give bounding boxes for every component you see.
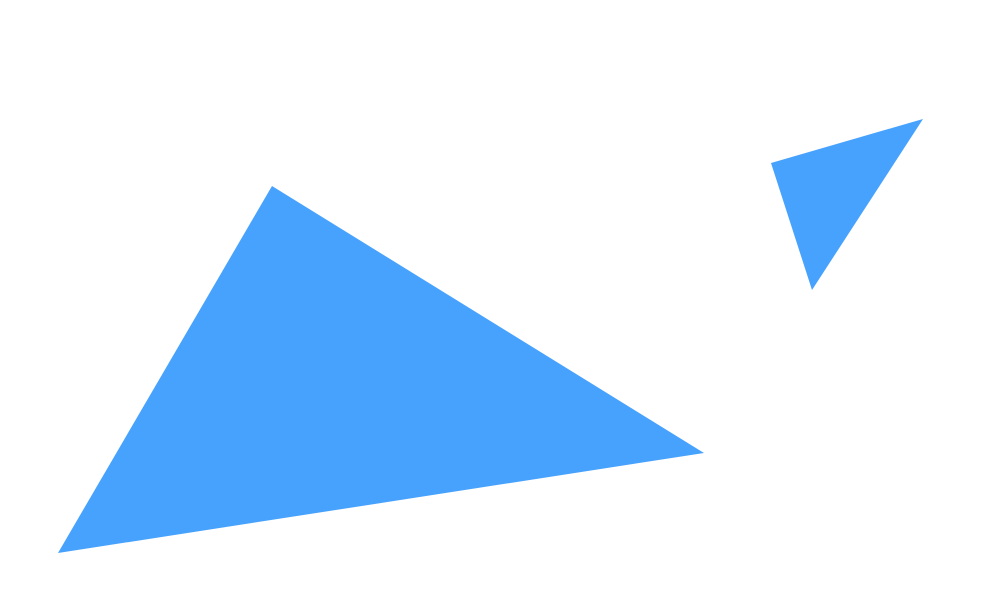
small blue triangle — [771, 119, 923, 290]
large blue triangle — [58, 186, 704, 553]
